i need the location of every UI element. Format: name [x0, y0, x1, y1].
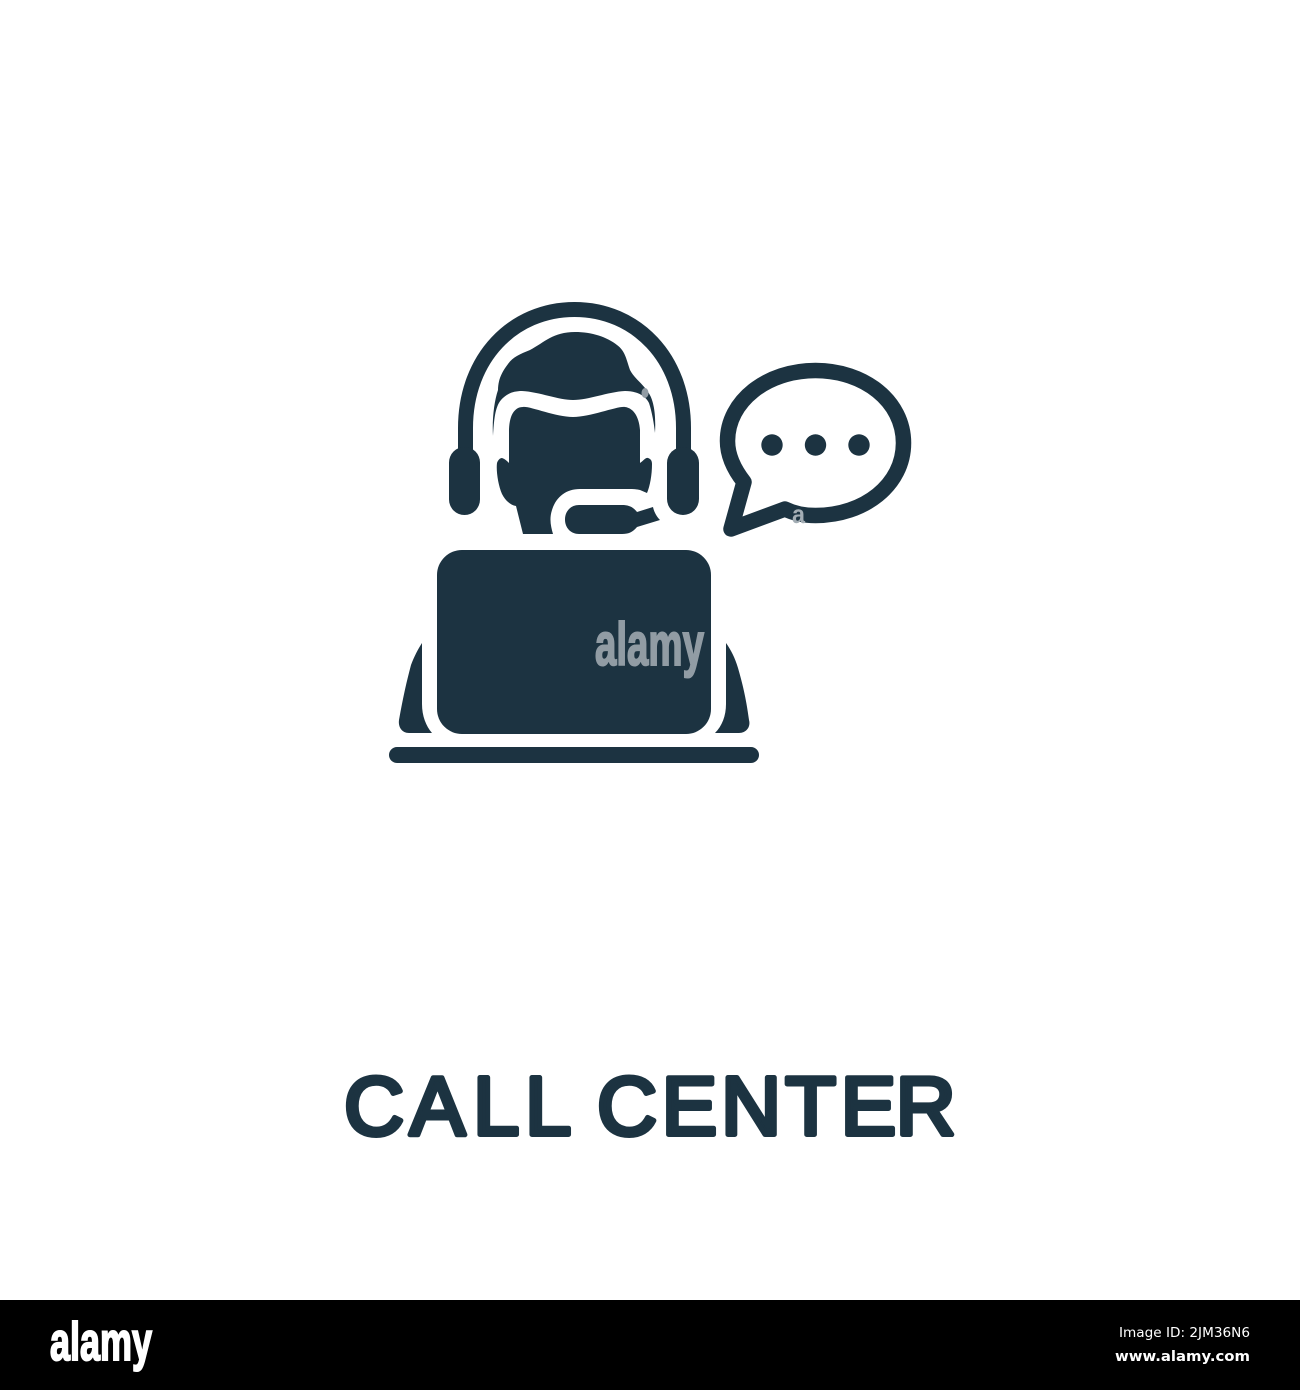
icon: left ear cup [449, 447, 480, 515]
icon: desk line [389, 747, 759, 763]
speech bubble outline [728, 370, 904, 529]
icon: right ear cup [667, 447, 699, 515]
icon: laptop [437, 550, 711, 734]
icon: headset microphone [565, 505, 660, 534]
footer url: www.alamy.com [1115, 1349, 1250, 1365]
footer bar [0, 1300, 1300, 1390]
icon: right arm [715, 643, 749, 733]
icon: call center agent at laptop [389, 310, 759, 763]
speech bubble dots [761, 434, 870, 456]
title: CALL CENTER [344, 1060, 956, 1152]
icon: headset band [466, 310, 684, 452]
watermark: alamy on laptop: alamy [595, 611, 704, 678]
icon: face with ears [497, 407, 652, 534]
footer logo: alamy [50, 1312, 152, 1372]
watermark fragment on bubble: a [792, 499, 805, 529]
watermark fragment on hair [642, 388, 648, 398]
icon: left arm [399, 643, 432, 733]
icon: hair [493, 332, 655, 436]
footer image id: Image ID: 2JM36N6 [1119, 1326, 1250, 1341]
icon: speech bubble [728, 370, 904, 529]
